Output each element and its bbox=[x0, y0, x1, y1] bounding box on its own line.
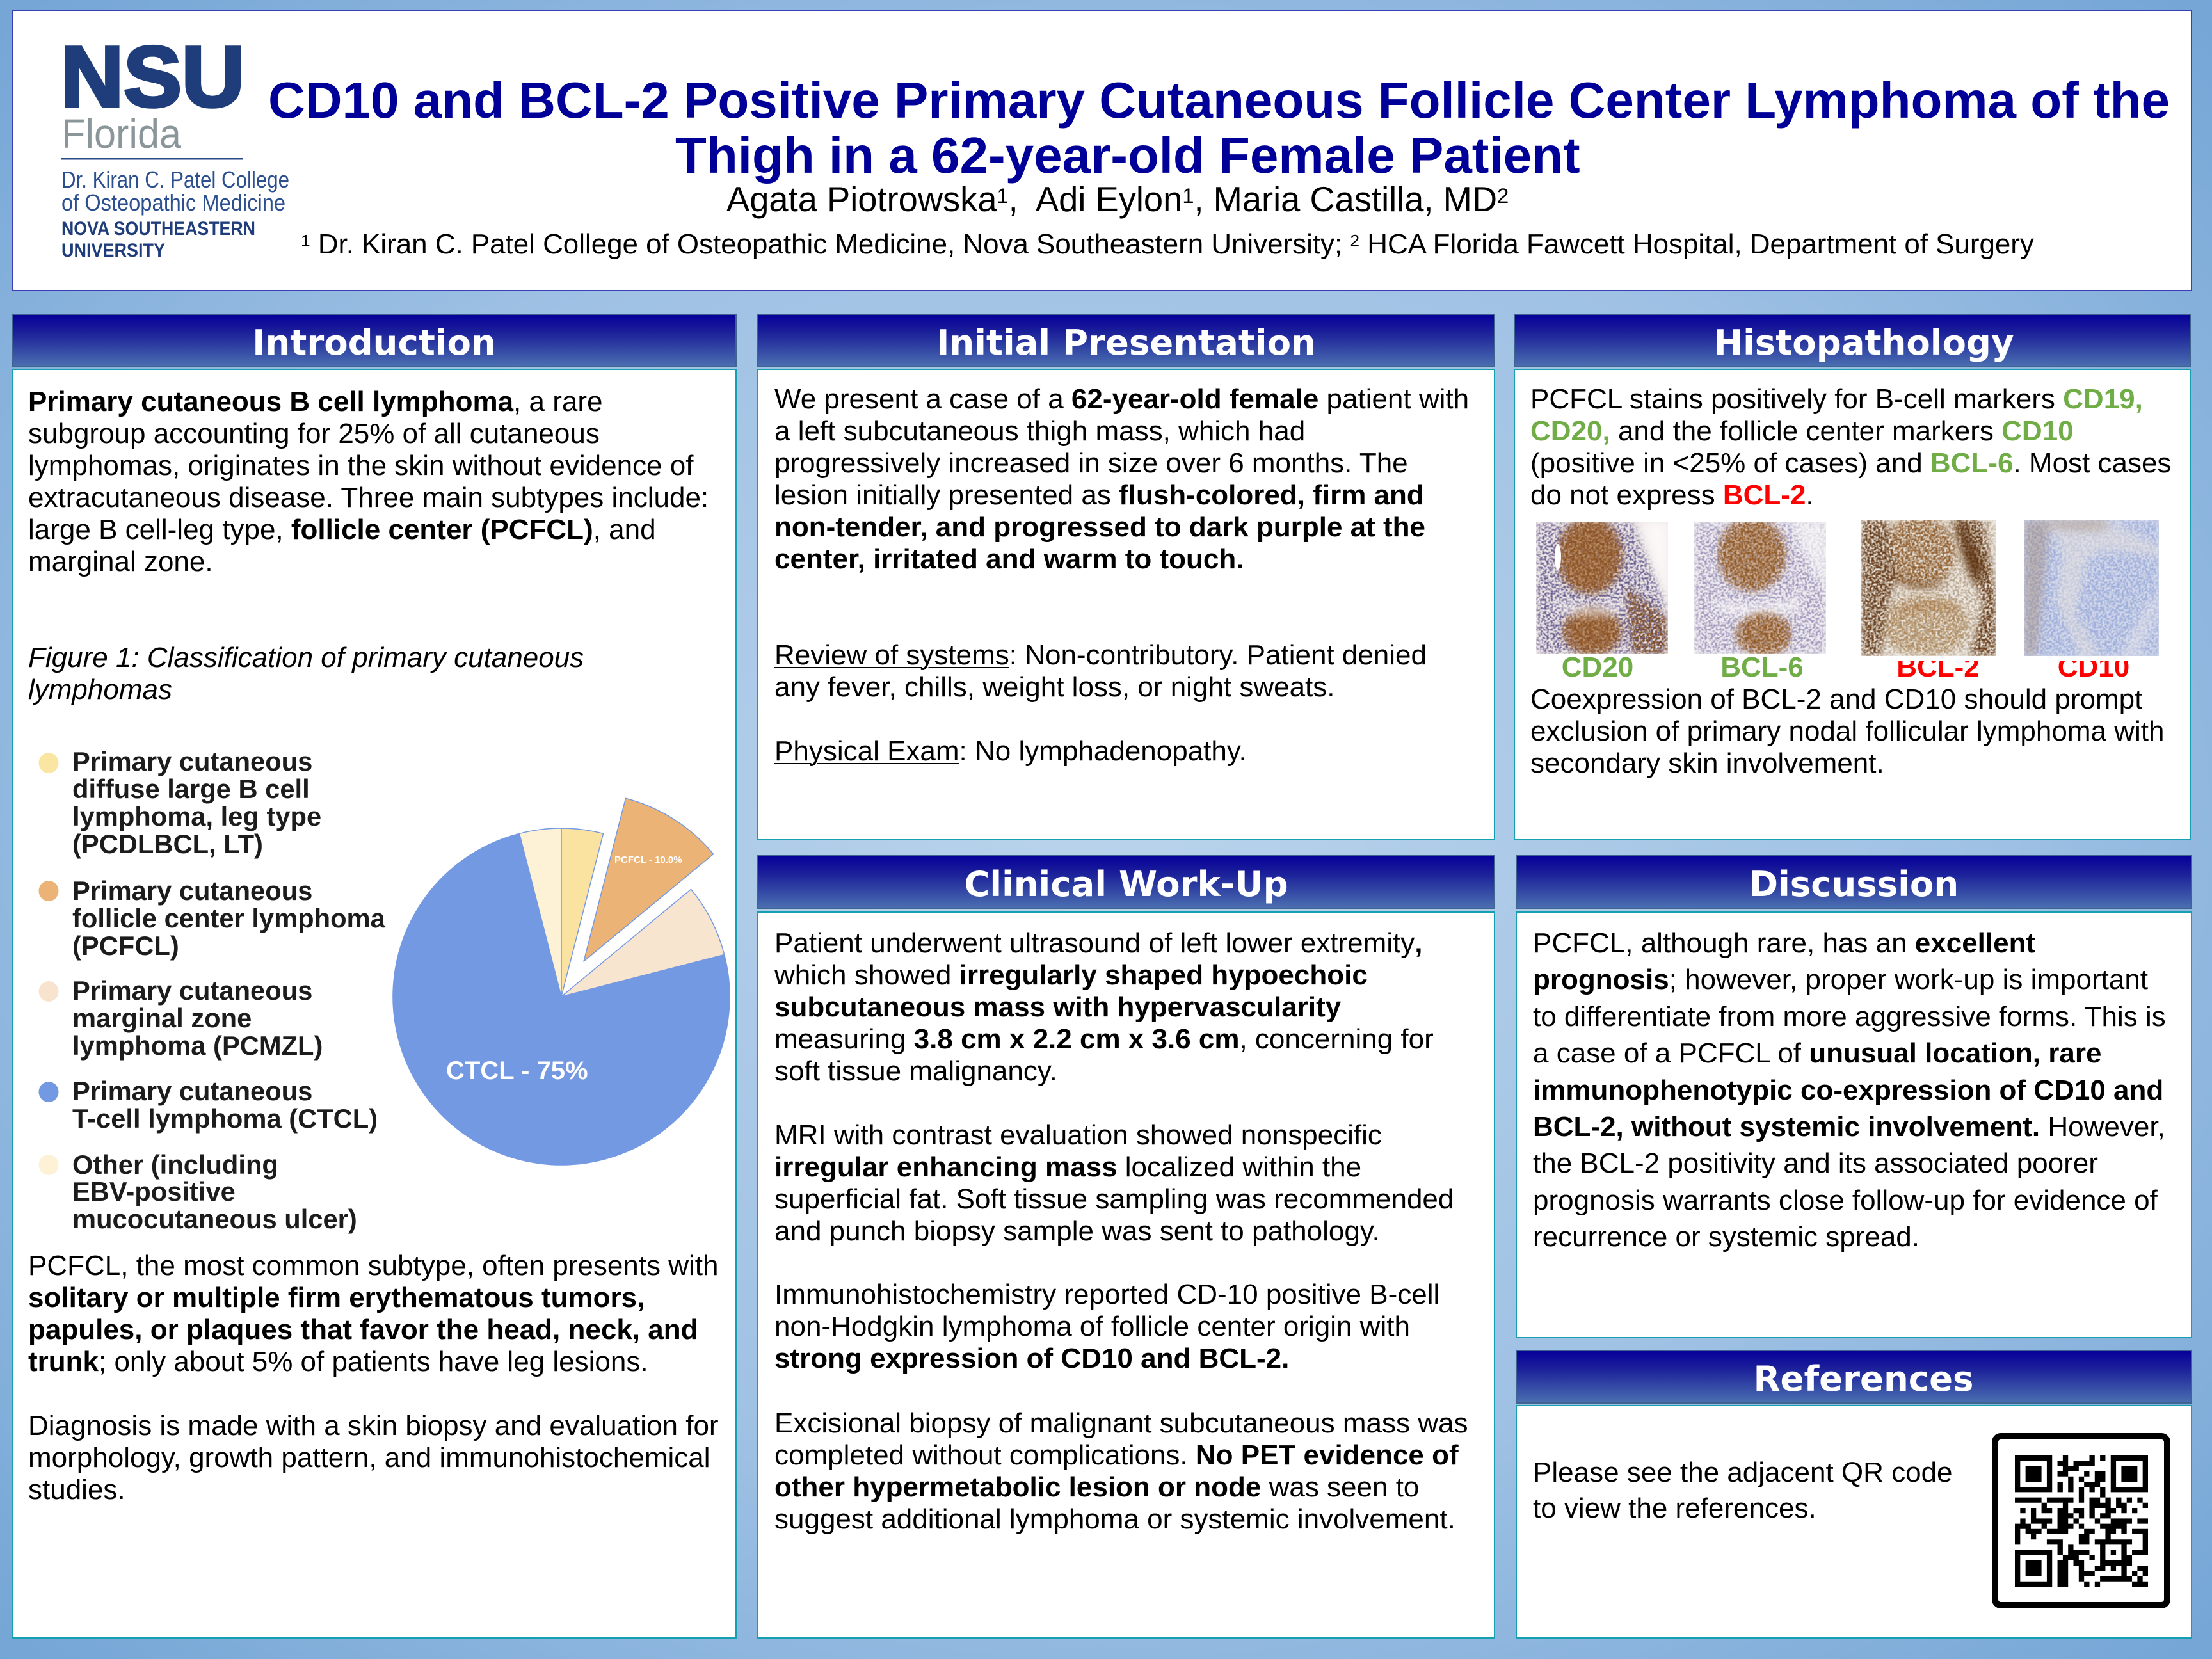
ultrasound paragraph: which showed irregularly shaped hypoechoic bbox=[774, 959, 1368, 991]
image: CD10 bbox=[2024, 520, 2159, 656]
figure caption: lymphomas bbox=[28, 674, 172, 705]
diagnosis paragraph bbox=[28, 1410, 719, 1505]
panel body bbox=[1514, 369, 2191, 840]
figure: legend and pie chart bbox=[38, 746, 730, 1234]
legend: Primary cutaneous bbox=[72, 746, 312, 776]
image labels: CD10 bbox=[2058, 652, 2129, 683]
heading: Clinical Work-Up bbox=[757, 855, 1495, 909]
coexpression paragraph: exclusion of primary nodal follicular lymphoma with bbox=[1530, 716, 2164, 747]
heading: Histopathology: Histopathology bbox=[1714, 322, 2014, 363]
references text: to view the references. bbox=[1533, 1493, 1816, 1524]
ultrasound paragraph: soft tissue malignancy. bbox=[774, 1055, 1057, 1087]
PCFCL paragraph: solitary or multiple firm erythematous tumors, bbox=[28, 1282, 645, 1313]
panel: Discussion bbox=[1516, 855, 2192, 1338]
legend bbox=[38, 746, 386, 1234]
legend: mucocutaneous ulcer) bbox=[72, 1204, 357, 1234]
panel body bbox=[1516, 1405, 2192, 1639]
legend: Other (including bbox=[72, 1150, 278, 1180]
discussion paragraph: to differentiate from more aggressive forms. This is bbox=[1533, 1001, 2166, 1032]
heading: References: References bbox=[1754, 1358, 1973, 1399]
review of systems bbox=[774, 639, 1427, 703]
image labels bbox=[1562, 652, 2129, 683]
panel: Initial Presentation bbox=[757, 314, 1495, 840]
presentation paragraph: lesion initially presented as flush-colored, firm and bbox=[774, 479, 1424, 511]
title: CD10 and BCL-2 Positive Primary Cutaneous Follicle Center Lymphoma of the bbox=[268, 72, 2170, 129]
physical exam: Physical Exam: No lymphadenopathy. bbox=[774, 735, 1247, 767]
poster header bbox=[12, 10, 2192, 291]
image: BCL-6 bbox=[1694, 522, 1826, 654]
logo: NSU Florida bbox=[61, 32, 289, 261]
logo: NSU Florida: Dr. Kiran C. Patel College bbox=[61, 166, 289, 193]
discussion paragraph: PCFCL, although rare, has an excellent bbox=[1533, 927, 2035, 959]
logo: NSU Florida: NSU bbox=[61, 32, 244, 125]
title: Thigh in a 62-year-old Female Patient bbox=[675, 127, 1580, 184]
excisional biopsy paragraph: suggest additional lymphoma or systemic involvement. bbox=[774, 1503, 1455, 1535]
discussion paragraph: a case of a PCFCL of unusual location, rare bbox=[1533, 1038, 2101, 1069]
figure caption bbox=[28, 642, 584, 705]
discussion paragraph: prognosis warrants close follow-up for evidence of bbox=[1533, 1185, 2158, 1216]
coexpression paragraph: secondary skin involvement. bbox=[1530, 748, 1884, 779]
presentation paragraph: center, irritated and warm to touch. bbox=[774, 543, 1244, 575]
MRI paragraph bbox=[774, 1119, 1454, 1247]
image labels: BCL-6 bbox=[1720, 652, 1804, 683]
legend: follicle center lymphoma bbox=[72, 903, 386, 933]
image labels: BCL-2 bbox=[1896, 652, 1980, 683]
immunohistochemistry paragraph: Immunohistochemistry reported CD-10 positive B-cell bbox=[774, 1279, 1439, 1310]
figure: legend and pie chart: CTCL - 75% bbox=[446, 1057, 588, 1085]
heading: References bbox=[1516, 1350, 2192, 1404]
ultrasound paragraph: measuring 3.8 cm x 2.2 cm x 3.6 cm, concerning for bbox=[774, 1023, 1434, 1055]
MRI paragraph: irregular enhancing mass localized within the bbox=[774, 1151, 1361, 1183]
legend: Primary cutaneous bbox=[72, 1076, 312, 1106]
heading: Initial Presentation bbox=[757, 314, 1495, 367]
legend: marginal zone bbox=[72, 1003, 252, 1033]
heading: Introduction bbox=[12, 314, 737, 367]
legend: lymphoma (PCMZL) bbox=[72, 1030, 323, 1061]
intro paragraph: lymphomas, originates in the skin without evidence of bbox=[28, 450, 693, 481]
diagnosis paragraph: morphology, growth pattern, and immunohistochemical bbox=[28, 1442, 710, 1473]
discussion paragraph: immunophenotypic co-expression of CD10 and bbox=[1533, 1075, 2163, 1106]
discussion paragraph: BCL-2, without systemic involvement. However, bbox=[1533, 1111, 2165, 1142]
excisional biopsy paragraph: Excisional biopsy of malignant subcutaneous mass was bbox=[774, 1407, 1468, 1439]
intro paragraph: Primary cutaneous B cell lymphoma, a rare bbox=[28, 386, 602, 417]
discussion paragraph: recurrence or systemic spread. bbox=[1533, 1221, 1919, 1253]
MRI paragraph: superficial fat. Soft tissue sampling was recommended bbox=[774, 1183, 1454, 1215]
intro paragraph: subgroup accounting for 25% of all cutaneous bbox=[28, 418, 600, 449]
image labels: CD20 bbox=[1562, 652, 1633, 683]
intro paragraph: large B cell-leg type, follicle center (PCFCL), and bbox=[28, 514, 656, 545]
logo: NSU Florida: NOVA SOUTHEASTERN bbox=[61, 218, 255, 239]
heading: Initial Presentation: Initial Presentation bbox=[936, 322, 1316, 363]
histopathology paragraph bbox=[1530, 383, 2171, 511]
diagnosis paragraph: Diagnosis is made with a skin biopsy and evaluation for bbox=[28, 1410, 719, 1441]
legend: EBV-positive bbox=[72, 1176, 236, 1206]
authors: Agata Piotrowska1, Adi Eylon1, Maria Castilla, MD2 bbox=[726, 180, 1509, 219]
histopathology paragraph: (positive in <25% of cases) and BCL-6. Most cases bbox=[1530, 447, 2171, 479]
histopathology paragraph: do not express BCL-2. bbox=[1530, 479, 1814, 511]
presentation paragraph: We present a case of a 62-year-old female patient with bbox=[774, 383, 1469, 415]
excisional biopsy paragraph: completed without complications. No PET evidence of bbox=[774, 1439, 1459, 1471]
presentation paragraph bbox=[774, 383, 1469, 575]
immunohistochemistry paragraph bbox=[774, 1279, 1439, 1375]
legend: Primary cutaneous bbox=[72, 975, 312, 1006]
ultrasound paragraph: subcutaneous mass with hypervascularity bbox=[774, 991, 1341, 1023]
references text bbox=[1533, 1455, 1953, 1527]
panel: Clinical Work-Up bbox=[757, 855, 1495, 1639]
heading: Discussion: Discussion bbox=[1749, 863, 1959, 904]
logo: NSU Florida: of Osteopathic Medicine bbox=[61, 189, 285, 216]
immunohistochemistry paragraph: non-Hodgkin lymphoma of follicle center origin with bbox=[774, 1311, 1410, 1342]
discussion paragraph: the BCL-2 positivity and its associated poorer bbox=[1533, 1148, 2098, 1179]
review of systems: any fever, chills, weight loss, or night sweats. bbox=[774, 671, 1335, 703]
logo: NSU Florida: Florida bbox=[61, 111, 181, 157]
affiliations: 1 Dr. Kiran C. Patel College of Osteopathic Medicine, Nova Southeastern University; 2 HCA Florida Fawcett Hospital, Department of Surgery bbox=[301, 228, 2034, 260]
legend: lymphoma, leg type bbox=[72, 801, 321, 831]
MRI paragraph: and punch biopsy sample was sent to pathology. bbox=[774, 1215, 1380, 1247]
intro paragraph: extracutaneous disease. Three main subtypes include: bbox=[28, 482, 709, 513]
intro paragraph bbox=[28, 386, 709, 577]
excisional biopsy paragraph bbox=[774, 1407, 1468, 1535]
panel: References bbox=[1516, 1350, 2192, 1639]
histopathology paragraph: PCFCL stains positively for B-cell markers CD19, bbox=[1530, 383, 2143, 415]
title bbox=[268, 72, 2170, 184]
panel body bbox=[757, 369, 1495, 840]
pie chart bbox=[393, 798, 730, 1165]
legend: (PCDLBCL, LT) bbox=[72, 829, 263, 859]
heading: Histopathology bbox=[1514, 314, 2191, 367]
PCFCL paragraph: trunk; only about 5% of patients have leg lesions. bbox=[28, 1346, 648, 1377]
image: BCL-2 bbox=[1861, 520, 1996, 656]
review of systems: Review of systems: Non-contributory. Patient denied bbox=[774, 639, 1427, 671]
PCFCL paragraph: papules, or plaques that favor the head, neck, and bbox=[28, 1314, 698, 1345]
heading: Discussion bbox=[1516, 855, 2192, 909]
coexpression paragraph: Coexpression of BCL-2 and CD10 should prompt bbox=[1530, 684, 2142, 715]
image: CD20 bbox=[1536, 522, 1668, 654]
excisional biopsy paragraph: other hypermetabolic lesion or node was seen to bbox=[774, 1471, 1419, 1503]
presentation paragraph: progressively increased in size over 6 months. The bbox=[774, 447, 1408, 479]
figure caption: Figure 1: Classification of primary cutaneous bbox=[28, 642, 584, 673]
discussion paragraph: prognosis; however, proper work-up is important bbox=[1533, 964, 2148, 995]
figure: legend and pie chart: PCFCL - 10.0% bbox=[614, 854, 682, 865]
heading: Clinical Work-Up: Clinical Work-Up bbox=[964, 863, 1288, 904]
panel body bbox=[1516, 911, 2192, 1338]
stained tissue images with labels bbox=[1536, 520, 2159, 683]
panel body bbox=[757, 911, 1495, 1639]
panel body bbox=[12, 369, 737, 1639]
panel: Introduction bbox=[12, 314, 737, 1639]
legend: (PCFCL) bbox=[72, 931, 179, 961]
references text: Please see the adjacent QR code bbox=[1533, 1457, 1953, 1488]
immunohistochemistry paragraph: strong expression of CD10 and BCL-2. bbox=[774, 1343, 1289, 1374]
presentation paragraph: a left subcutaneous thigh mass, which had bbox=[774, 415, 1305, 447]
heading: Introduction: Introduction bbox=[252, 322, 496, 363]
logo: NSU Florida: UNIVERSITY bbox=[61, 240, 165, 261]
discussion paragraph bbox=[1533, 925, 2166, 1256]
legend: T-cell lymphoma (CTCL) bbox=[72, 1103, 378, 1134]
presentation paragraph: non-tender, and progressed to dark purple at the bbox=[774, 511, 1425, 543]
panel: Histopathology bbox=[1514, 314, 2191, 840]
legend: Primary cutaneous bbox=[72, 876, 312, 906]
QR code bbox=[1992, 1433, 2170, 1608]
intro paragraph: marginal zone. bbox=[28, 546, 213, 577]
PCFCL paragraph bbox=[28, 1250, 718, 1377]
diagnosis paragraph: studies. bbox=[28, 1474, 125, 1505]
legend: diffuse large B cell bbox=[72, 774, 310, 804]
histopathology paragraph: CD20, and the follicle center markers CD10 bbox=[1530, 415, 2074, 447]
ultrasound paragraph: Patient underwent ultrasound of left lower extremity, bbox=[774, 927, 1423, 959]
ultrasound paragraph bbox=[774, 927, 1434, 1087]
MRI paragraph: MRI with contrast evaluation showed nonspecific bbox=[774, 1119, 1382, 1151]
coexpression paragraph bbox=[1530, 684, 2164, 779]
PCFCL paragraph: PCFCL, the most common subtype, often presents with bbox=[28, 1250, 718, 1281]
